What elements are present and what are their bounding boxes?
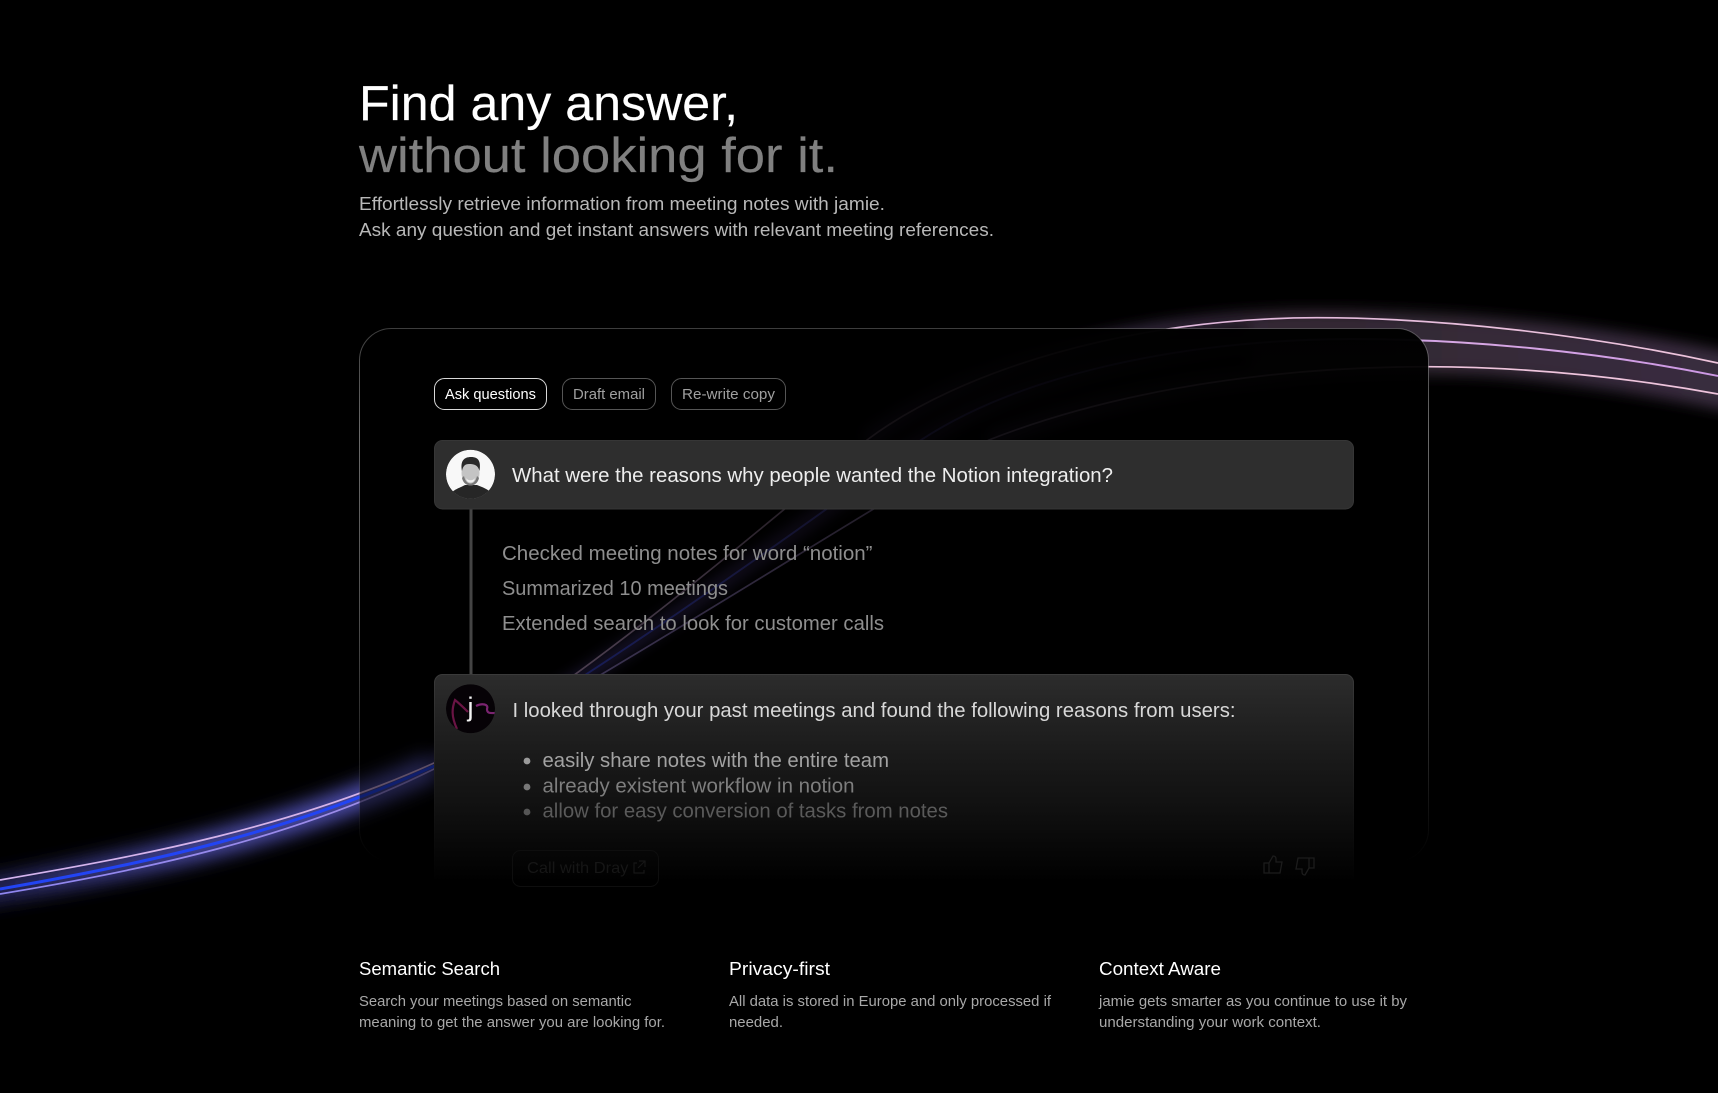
feature: semantic search: Semantic Search — [359, 958, 500, 979]
feature: context aware: jamie gets smarter as you continue to use it by — [1098, 994, 1408, 1010]
connector line — [470, 509, 472, 675]
tab: ask questions — [434, 378, 546, 410]
bullet list — [524, 750, 948, 822]
title: Find any answer, — [359, 77, 738, 131]
feature: privacy-first: All data is stored in Europe and only processed if — [729, 994, 1052, 1010]
bullet list: allow for easy conversion of tasks from notes — [542, 800, 948, 822]
feature: context aware: Context Aware — [1099, 958, 1221, 979]
feature: semantic search — [359, 958, 665, 1031]
question bubble — [434, 440, 1354, 509]
icon: jamie avatar — [446, 684, 495, 733]
icon: jamie avatar: j — [466, 692, 474, 722]
light wave — [0, 318, 1718, 894]
tab: draft email: Draft email — [573, 387, 645, 403]
process steps: Summarized 10 meetings — [502, 578, 728, 600]
question bubble: What were the reasons why people wanted the Notion integration? — [512, 465, 1113, 487]
answer bubble — [434, 674, 1354, 886]
feature: privacy-first: needed. — [729, 1015, 783, 1031]
icon: thumbs down — [1296, 858, 1314, 875]
subtitle: Ask any question and get instant answers with relevant meeting references. — [359, 220, 994, 240]
subtitle — [359, 194, 994, 240]
feature: semantic search: meaning to get the answer you are looking for. — [359, 1015, 665, 1031]
tab: re-write copy — [672, 378, 786, 410]
bullet list: already existent workflow in notion — [542, 776, 854, 798]
subtitle: Effortlessly retrieve information from meeting notes with jamie. — [359, 194, 885, 214]
feature: privacy-first: Privacy-first — [729, 958, 830, 979]
feature: privacy-first — [729, 958, 1052, 1031]
feature: semantic search: Search your meetings based on semantic — [359, 994, 632, 1010]
bullet list: easily share notes with the entire team — [542, 750, 889, 772]
reference chip — [512, 850, 658, 886]
feature: context aware: understanding your work context. — [1099, 1015, 1321, 1031]
icon: thumbs up — [1264, 856, 1282, 873]
title — [358, 77, 838, 183]
answer bubble: I looked through your past meetings and found the following reasons from users: — [512, 700, 1236, 722]
tab: draft email — [562, 378, 656, 410]
process steps: Checked meeting notes for word “notion” — [502, 543, 873, 565]
icon: user avatar — [446, 450, 496, 500]
tab: ask questions: Ask questions — [445, 387, 536, 403]
tab: re-write copy: Re-write copy — [682, 387, 776, 403]
panel: chat card — [360, 328, 1428, 886]
title: without looking for it. — [358, 129, 838, 183]
process steps: Extended search to look for customer calls — [502, 613, 884, 635]
reference chip: Call with Dray — [527, 860, 628, 877]
process steps — [502, 543, 884, 635]
feature: context aware — [1098, 958, 1408, 1031]
